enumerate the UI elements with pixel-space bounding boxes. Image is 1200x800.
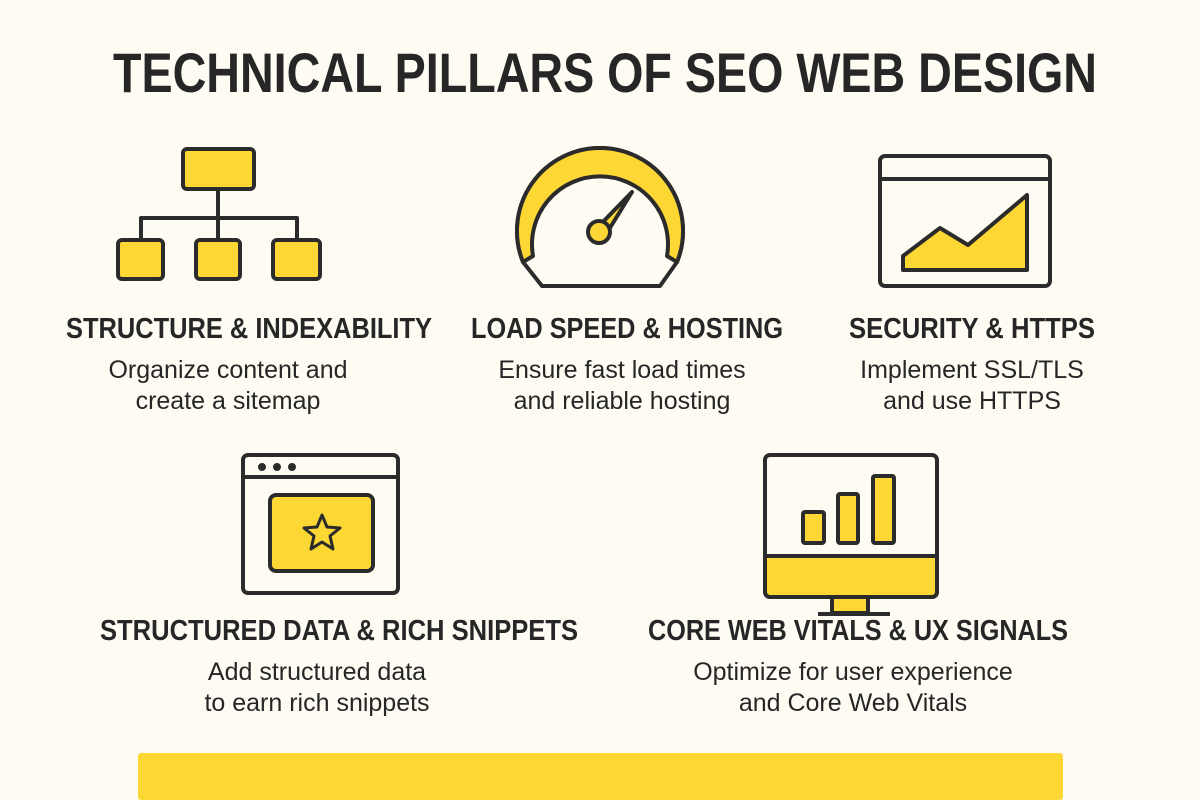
panel: speed <box>471 148 783 384</box>
heading: structured data: STRUCTURED DATA & RICH SNIPPETS <box>100 615 578 647</box>
panel: core web vitals <box>648 455 1068 686</box>
panel: security <box>849 156 1095 384</box>
heading: speed: LOAD SPEED & HOSTING <box>471 313 783 345</box>
text: to earn rich snippets <box>204 689 430 717</box>
text: and Core Web Vitals <box>739 689 967 717</box>
text: core web vitals: Optimize for user experience <box>693 658 1013 686</box>
text: and reliable hosting <box>514 387 730 415</box>
icon: browser star <box>243 455 398 593</box>
panel: structured data <box>100 455 578 686</box>
text: create a sitemap <box>136 387 320 415</box>
icon: browser chart <box>880 156 1050 286</box>
text: structure: Organize content and <box>108 356 348 384</box>
icon: monitor bars <box>765 455 937 614</box>
heading: structure: STRUCTURE & INDEXABILITY <box>66 313 432 345</box>
icon: hierarchy <box>118 149 320 279</box>
text: and use HTTPS <box>883 387 1061 415</box>
heading: core web vitals: CORE WEB VITALS & UX SIGNALS <box>648 615 1068 647</box>
panel: structure <box>66 149 432 384</box>
text: security: Implement SSL/TLS <box>860 356 1084 384</box>
footer bar <box>138 753 1063 800</box>
heading: security: SECURITY & HTTPS <box>849 313 1095 345</box>
icon: gauge <box>517 148 683 286</box>
text: structured data: Add structured data <box>208 658 426 686</box>
text: speed: Ensure fast load times <box>498 356 746 384</box>
